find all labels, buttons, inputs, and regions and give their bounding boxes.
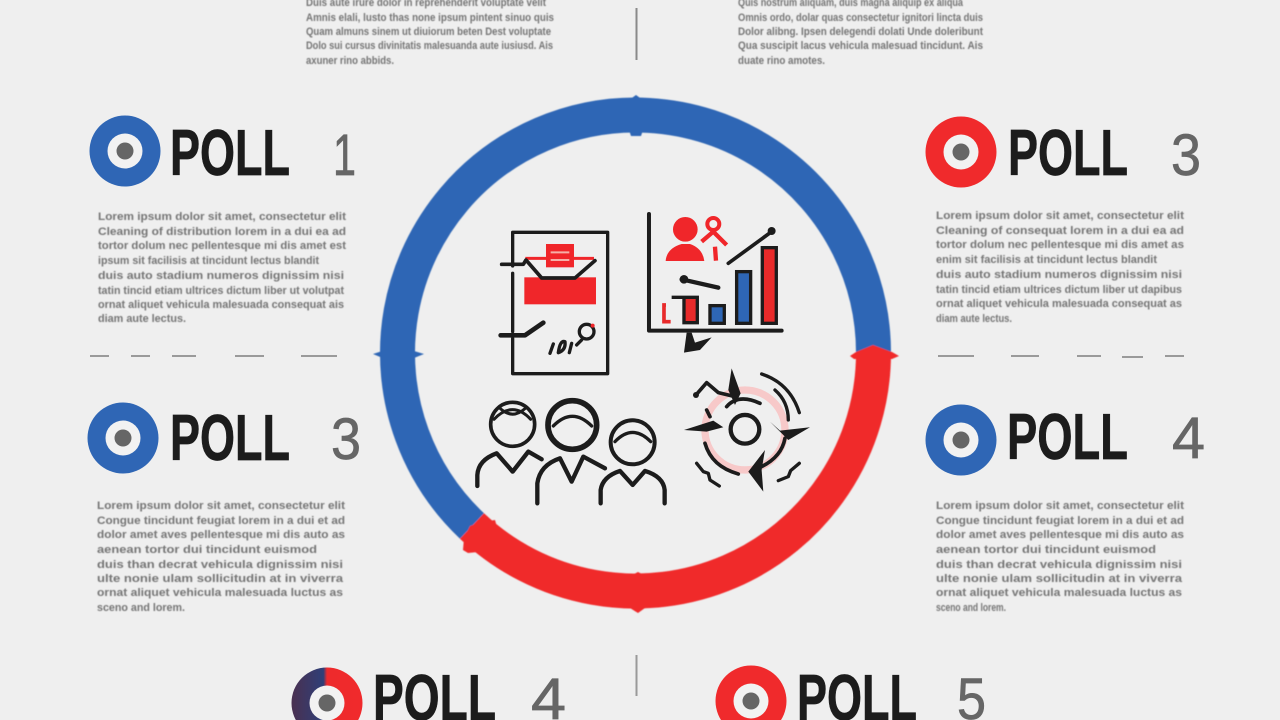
text block: poll 4 right: ulte nonie ulam sollicitudin at in viverra bbox=[936, 573, 1183, 585]
poll 3 right heading: POLL bbox=[1008, 116, 1128, 189]
text block: poll 3 right bbox=[936, 210, 1184, 325]
text block: poll 1: Cleaning of distribution lorem in a dui ea ad bbox=[98, 226, 346, 238]
icon: three people bbox=[477, 401, 665, 503]
text block: poll 4 right: Lorem ipsum dolor sit amet, consectetur elit bbox=[936, 500, 1184, 512]
text block: poll 3 right: tortor dolum nec pellentesque mi dis amet as bbox=[936, 239, 1184, 251]
text block: poll 3 right: tatin tincid etiam ultrices dictum liber ut dapibus bbox=[936, 284, 1182, 296]
poll 4 right heading bbox=[926, 400, 1205, 476]
arrowhead: left bbox=[373, 348, 424, 362]
poll 4 bottom heading bbox=[292, 661, 566, 720]
circular arrow ring bbox=[373, 95, 899, 613]
text block: top left: Quam almuns sinem ut diuiorum beten Dest voluptate bbox=[306, 26, 551, 38]
text block: poll 4 right bbox=[936, 500, 1184, 614]
poll 4 right heading: POLL bbox=[1007, 400, 1128, 473]
text block: poll 4 right: aenean tortor dui tincidunt euismod bbox=[936, 544, 1156, 556]
text block: poll 3 right: Cleaning of consequat lorem in a dui ea ad bbox=[936, 225, 1184, 237]
text block: poll 3 left: sceno and lorem. bbox=[97, 602, 185, 614]
text block: poll 4 right: duis than decrat vehicula dignissim nisi bbox=[936, 559, 1182, 571]
text block: poll 1: diam aute lectus. bbox=[98, 313, 186, 325]
text block: top left: Amnis elali, lusto thas none ipsum pintent sinuo quis bbox=[306, 12, 554, 24]
poll 3 right heading bbox=[926, 116, 1201, 189]
text block: top right: Qua suscipit lacus vehicula malesuad tincidunt. Ais bbox=[738, 40, 983, 52]
text block: poll 3 left: ulte nonie ulam sollicitudin at in viverra bbox=[97, 573, 344, 585]
text block: top right: duate rino amotes. bbox=[738, 55, 825, 67]
arrowhead: right bbox=[850, 345, 899, 359]
arc: red bbox=[472, 354, 874, 591]
poll 5 heading bbox=[716, 661, 986, 720]
text block: poll 3 right: diam aute lectus. bbox=[936, 313, 1012, 325]
text block: top left: Dolo sui cursus divinitatis malesuanda aute iusiusd. Ais bbox=[306, 40, 553, 52]
divider: bottom bbox=[636, 655, 638, 696]
poll 3 left heading: POLL bbox=[170, 401, 290, 474]
text block: poll 3 left: aenean tortor dui tincidunt euismod bbox=[97, 544, 317, 556]
text block: poll 4 right: dolor amet aves pellentesque mi dis auto as bbox=[936, 529, 1184, 541]
text block: poll 4 right: ornat aliquet vehicula malesuada luctus as bbox=[936, 587, 1182, 599]
divider: left dashed bbox=[90, 355, 337, 357]
text block: poll 1: ipsum sit facilisis at tincidunt lectus blandit bbox=[98, 255, 319, 267]
center icons bbox=[477, 214, 810, 503]
poll 1 heading: 1 bbox=[333, 123, 356, 188]
poll 4 right heading: 4 bbox=[1172, 406, 1205, 471]
text block: poll 1: tortor dolum nec pellentesque mi dis amet est bbox=[98, 240, 346, 252]
arrowhead: top bbox=[629, 95, 643, 136]
text block: poll 1: Lorem ipsum dolor sit amet, consectetur elit bbox=[98, 211, 346, 223]
text block: top left bbox=[306, 0, 554, 67]
text block: top left: axuner rino abbids. bbox=[306, 55, 394, 67]
text block: poll 1 bbox=[98, 211, 346, 325]
text block: poll 3 left: ornat aliquet vehicula malesuada luctus as bbox=[97, 587, 343, 599]
text block: poll 3 right: Lorem ipsum dolor sit amet, consectetur elit bbox=[936, 210, 1184, 222]
icon: gear target bbox=[684, 368, 810, 492]
text block: poll 3 right: enim sit facilisis at tincidunt lectus blandit bbox=[936, 254, 1157, 266]
divider: right dashed bbox=[938, 355, 1184, 358]
text block: poll 4 right: sceno and lorem. bbox=[936, 602, 1006, 614]
text block: poll 1: ornat aliquet vehicula malesuada consequat ais bbox=[98, 299, 344, 311]
arc: blue bbox=[398, 115, 874, 526]
poll 3 left heading: 3 bbox=[331, 407, 361, 472]
arrowhead: bottom bbox=[630, 572, 646, 613]
poll 3 right heading: 3 bbox=[1171, 123, 1201, 188]
poll 3 left heading bbox=[88, 401, 361, 474]
text block: poll 3 left: Congue tincidunt feugiat lorem in a dui et ad bbox=[97, 515, 345, 527]
arrowhead: lower left bbox=[463, 520, 497, 553]
text block: poll 4 right: Congue tincidunt feugiat lorem in a dui et ad bbox=[936, 515, 1184, 527]
icon: ballot document bbox=[501, 232, 608, 374]
text block: poll 3 right: duis auto stadium numeros dignissim nisi bbox=[936, 269, 1182, 281]
text block: poll 1: tatin tincid etiam ultrices dictum liber ut volutpat bbox=[98, 285, 344, 297]
text block: poll 3 left bbox=[97, 500, 345, 614]
text block: poll 3 left: Lorem ipsum dolor sit amet, consectetur elit bbox=[97, 500, 345, 512]
poll 1 heading: POLL bbox=[170, 116, 290, 189]
icon: bar chart with people bbox=[649, 214, 782, 353]
text block: top right: Omnis ordo, dolar quas consectetur ignitori lincta duis bbox=[738, 12, 983, 24]
text block: poll 3 left: duis than decrat vehicula dignissim nisi bbox=[97, 559, 343, 571]
text block: poll 3 left: dolor amet aves pellentesque mi dis auto as bbox=[97, 529, 345, 541]
poll 1 heading bbox=[90, 116, 356, 189]
text block: top right: Dolor alibng. Ipsen delegendi dolati Unde doleribunt bbox=[738, 26, 983, 38]
divider: top bbox=[636, 8, 638, 60]
text block: top right bbox=[738, 0, 983, 67]
text block: poll 1: duis auto stadium numeros dignissim nisi bbox=[98, 270, 344, 282]
text block: poll 3 right: ornat aliquet vehicula malesuada consequat as bbox=[936, 298, 1182, 310]
